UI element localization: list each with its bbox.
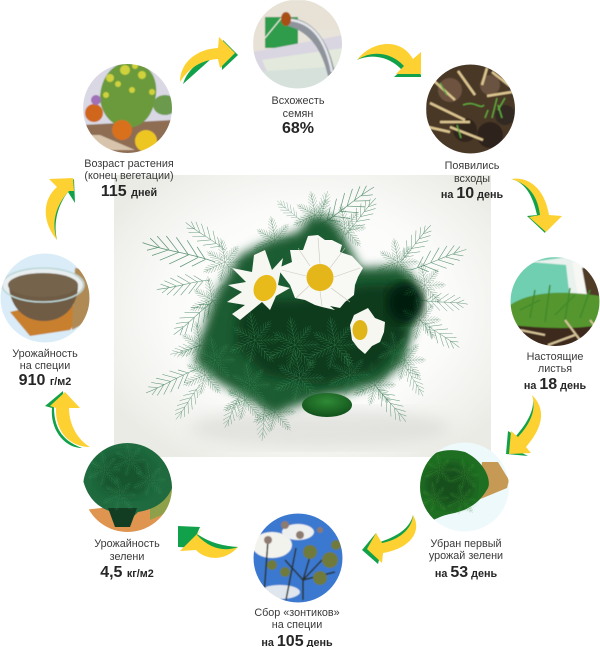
label: germination: Всхожесть [272, 95, 325, 107]
arrow: to plant age [46, 178, 75, 240]
label: sprouts: Появились [445, 160, 500, 172]
arrow: to umbel harvest [362, 515, 416, 564]
photo: first greens harvest [418, 442, 510, 532]
daisy: centre [278, 235, 363, 310]
label: first greens harvest: Убран первый [430, 538, 502, 550]
photo: seeds in glass dish [0, 253, 90, 343]
label: plant age: (конец вегетации) [84, 170, 174, 182]
arrow: to greens yield [178, 526, 238, 558]
daisy: right [350, 308, 385, 354]
photo: umbels against sky [252, 513, 343, 603]
central photo: dill bouquet with daisies [114, 175, 491, 457]
label: umbel harvest: на специи [272, 619, 322, 631]
label: true leaves [524, 351, 587, 393]
label: greens yield: зелени [110, 551, 144, 563]
label: umbel harvest [254, 607, 340, 647]
label: greens yield: Урожайность [94, 538, 160, 550]
label: greens yield: 4,5 кг/м2 [100, 564, 154, 581]
label: umbel harvest: Сбор «зонтиков» [254, 607, 340, 619]
daisy: left [227, 250, 290, 320]
label: spice yield: 910 г/м2 [19, 372, 71, 389]
label: sprouts: всходы [454, 173, 490, 185]
label: germination [272, 95, 325, 137]
arrow: to spice yield [45, 391, 90, 448]
label: first greens harvest: урожай зелени [429, 550, 503, 562]
label: greens yield [94, 538, 160, 581]
label: first greens harvest: на 53 день [435, 564, 498, 581]
label: true leaves: листья [538, 363, 572, 375]
label: sprouts [441, 160, 504, 202]
label: spice yield: на специи [20, 360, 70, 372]
label: spice yield [12, 348, 78, 389]
photo: seed in tweezers [253, 0, 343, 89]
arrow: to sprouts [357, 44, 421, 77]
photo: sprouts in soil [426, 64, 516, 154]
vase [302, 393, 352, 417]
photo: dill plant in pot [83, 440, 175, 533]
label: germination: 68% [282, 120, 314, 137]
label: germination: семян [283, 108, 313, 120]
photo: true leaves [510, 255, 600, 347]
photo: mature plant in garden [83, 62, 177, 154]
label: spice yield: Урожайность [12, 348, 78, 360]
label: sprouts: на 10 день [441, 185, 504, 202]
label: first greens harvest [429, 538, 503, 581]
arrow: to true leaves [511, 179, 562, 233]
label: plant age: Возраст растения [84, 158, 174, 170]
label: plant age [84, 158, 174, 200]
label: true leaves: Настоящие [527, 351, 583, 363]
arrow: to germination [180, 37, 238, 84]
label: true leaves: на 18 день [524, 376, 587, 393]
label: plant age: 115 дней [101, 183, 157, 200]
arrow: to first harvest [506, 395, 541, 456]
